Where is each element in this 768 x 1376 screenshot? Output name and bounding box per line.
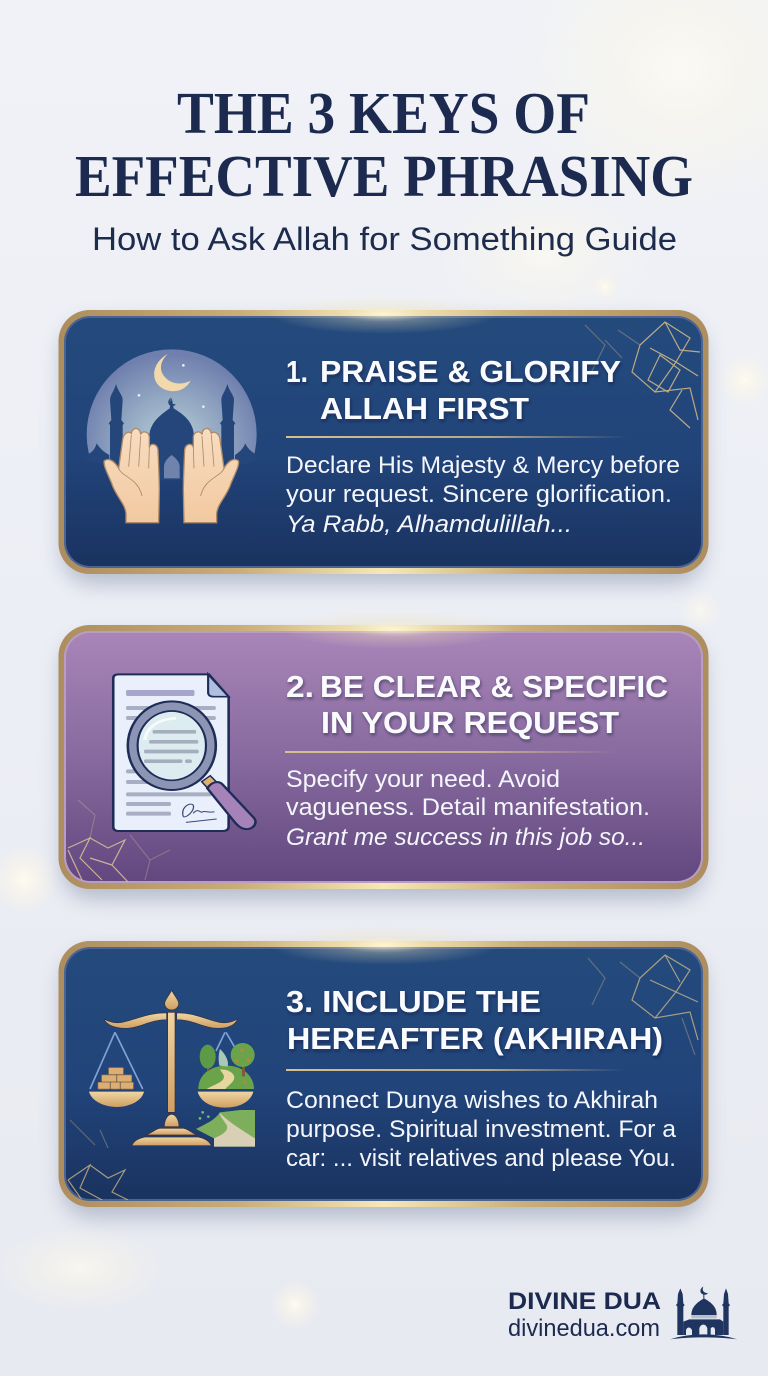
panel: key 2 be clear and specific — [58, 609, 708, 899]
icon: stars — [138, 364, 205, 408]
icon: praying hands before mosque — [87, 349, 257, 523]
icon: signature — [183, 804, 217, 822]
brand name and url: DIVINE DUA — [508, 1288, 661, 1315]
icon: left pan — [89, 1092, 144, 1107]
heading: key 3 — [286, 984, 663, 1056]
icon: gold bars on left pan — [98, 1068, 133, 1089]
text: key 1 description: Ya Rabb, Alhamdulillah... — [286, 511, 572, 538]
icon: crescent moon — [154, 354, 191, 391]
icon: document — [113, 674, 229, 831]
title — [75, 80, 693, 209]
icon: logo mosque — [670, 1287, 737, 1339]
text: key 2 description: vagueness. Detail manifestation. — [286, 794, 650, 821]
text: key 1 description: your request. Sincere glorification. — [286, 481, 672, 508]
ornament: geometric lines — [68, 955, 698, 1200]
heading: key 1 — [286, 354, 621, 426]
text: key 1 description — [286, 452, 680, 538]
icon: balance scale — [89, 990, 255, 1147]
title: EFFECTIVE PHRASING — [75, 143, 693, 209]
heading: key 3: 3. INCLUDE THE — [286, 984, 541, 1019]
icon: scale strings — [90, 1032, 235, 1089]
text: key 3 description: purpose. Spiritual investment. For a — [286, 1116, 677, 1143]
text: key 3 description — [286, 1087, 677, 1172]
heading: key 1: ALLAH FIRST — [320, 391, 529, 426]
heading: key 1: 1. — [286, 354, 308, 389]
icon: night sky arch — [86, 349, 257, 460]
heading: key 2: 2. — [286, 669, 314, 704]
heading: key 2: IN YOUR REQUEST — [321, 705, 619, 740]
icon: document with magnifying glass — [113, 674, 255, 831]
heading: key 3: HEREAFTER (AKHIRAH) — [287, 1021, 663, 1056]
panel: key 3 include the hereafter — [58, 925, 708, 1217]
panel: key 1 praise and glorify — [58, 294, 708, 584]
icon: left hand — [104, 428, 159, 523]
icon: magnifier lens — [128, 701, 216, 790]
icon: right pan — [198, 1092, 253, 1108]
icon: lower garden path — [196, 1110, 255, 1147]
text: key 2 description — [286, 766, 650, 851]
icon: scale column and beam — [104, 990, 238, 1146]
text: key 2 description: Grant me success in this job so... — [286, 824, 645, 851]
heading: key 1: PRAISE & GLORIFY — [320, 354, 621, 389]
text: key 1 description: Declare His Majesty & Mercy before — [286, 452, 680, 479]
icon: mosque silhouette — [87, 384, 257, 480]
brand name and url: divinedua.com — [508, 1315, 660, 1342]
heading: key 2: BE CLEAR & SPECIFIC — [320, 669, 668, 704]
icon: door — [164, 455, 180, 478]
subtitle: How to Ask Allah for Something Guide — [92, 221, 677, 257]
text: key 3 description: Connect Dunya wishes to Akhirah — [286, 1087, 658, 1114]
ornament: geometric lines — [68, 800, 170, 882]
heading: key 2 — [286, 669, 668, 740]
icon: magnifier handle — [202, 776, 219, 791]
text: key 3 description: car: ... visit relatives and please You. — [286, 1145, 676, 1172]
text: key 2 description: Specify your need. Avoid — [286, 766, 560, 793]
icon: right hand — [183, 428, 239, 523]
ornament: geometric lines — [585, 322, 700, 428]
icon: garden on right pan — [198, 1043, 255, 1089]
title: THE 3 KEYS OF — [177, 80, 590, 146]
brand name and url — [508, 1288, 661, 1342]
